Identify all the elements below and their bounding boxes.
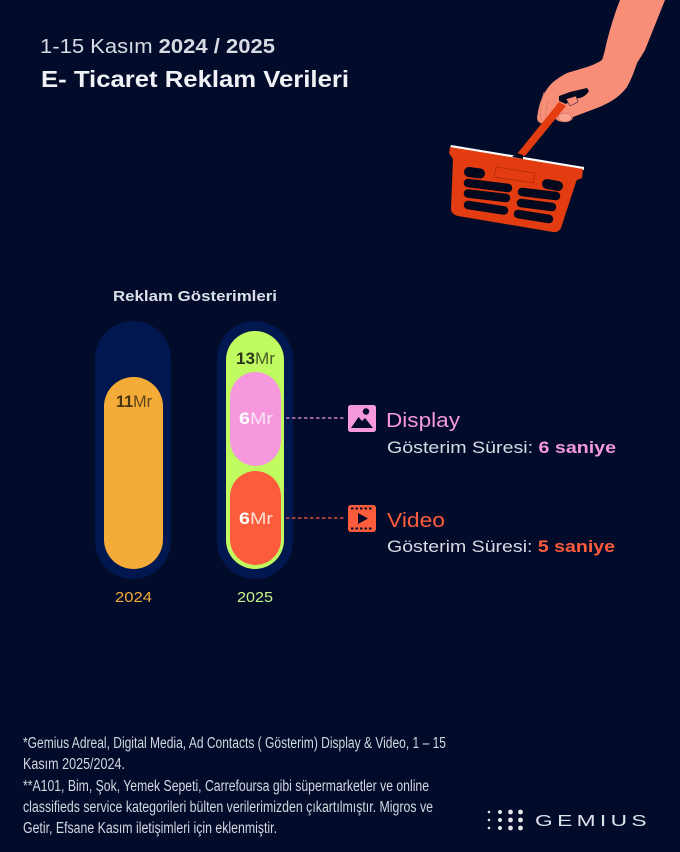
value 13Mr: 13Mr (236, 350, 276, 368)
value video 6Mr: 6Mr (239, 509, 273, 528)
logo wordmark: GEMIUS (535, 813, 651, 830)
bar track 2025 (217, 321, 293, 579)
title (40, 36, 349, 92)
heading: E- Ticaret Reklam Verileri (41, 66, 349, 92)
display duration: Gösterim Süresi: 6 saniye (387, 438, 616, 457)
basket slots (468, 172, 558, 219)
year label 2025: 2025 (237, 589, 273, 606)
video label: Video (387, 510, 445, 532)
footnote: **A101, Bim, Şok, Yemek Sepeti, Carrefoursa gibi süpermarketler ve online (23, 778, 429, 795)
subtitle: date range: 1-15 Kasım 2024 / 2025 (40, 36, 275, 58)
footnote (23, 735, 446, 837)
icon: image (348, 405, 376, 432)
value 11Mr: 11Mr (116, 393, 152, 411)
connector: display (286, 417, 344, 419)
bar fill 2024 (104, 377, 163, 569)
logo: Gemius (488, 810, 651, 830)
year label 2024: 2024 (115, 589, 152, 606)
footnote: *Gemius Adreal, Digital Media, Ad Contacts ( Gösterim) Display & Video, 1 – 15 (23, 735, 446, 752)
display label: Display (386, 410, 460, 432)
footnote: classifieds service kategorileri bülten verilerimizden çıkartılmıştır. Migros ve (23, 799, 433, 816)
basket label plate (494, 167, 535, 183)
footnote: Getir, Efsane Kasım iletişimleri için eklenmiştir. (23, 820, 277, 837)
hand (537, 0, 665, 123)
basket body (451, 158, 577, 232)
chart heading: Reklam Gösterimleri (113, 288, 277, 305)
legend: display (348, 405, 616, 457)
bar: 2025 (217, 321, 293, 606)
value display 6Mr: 6Mr (239, 409, 273, 428)
icon: film (348, 505, 376, 532)
logo dots (488, 810, 523, 830)
basket handle joint (512, 153, 523, 159)
bar: 2024 (95, 321, 171, 606)
bar fill 2025 (226, 331, 284, 569)
legend: video (348, 505, 615, 556)
connector: video (286, 517, 344, 519)
segment: video (230, 471, 281, 565)
basket rim (449, 147, 583, 180)
icon: hand holding shopping basket (449, 0, 665, 232)
video duration: Gösterim Süresi: 5 saniye (387, 537, 615, 556)
finger inside gap (566, 96, 578, 106)
basket handle (517, 102, 566, 156)
thumb nail (558, 113, 572, 122)
finger gap (559, 88, 589, 104)
footnote: Kasım 2025/2024. (23, 756, 125, 773)
finger creases (540, 92, 549, 120)
basket rim highlight (450, 145, 584, 170)
segment: display (230, 372, 281, 466)
bar track 2024 (95, 321, 171, 579)
